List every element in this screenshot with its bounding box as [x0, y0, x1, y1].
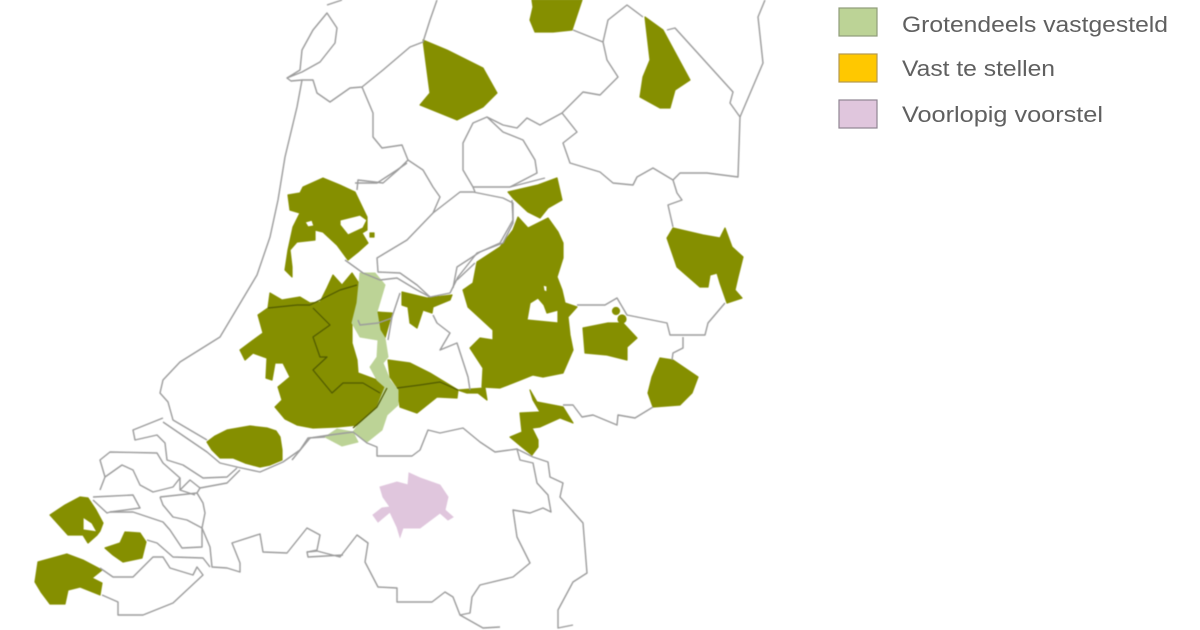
area: Gelderse Poort [510, 390, 573, 455]
area: river strip [458, 388, 487, 400]
legend item: vast te stellen [839, 54, 1055, 82]
area: Utrecht centre [402, 292, 452, 328]
area: Flevo corner [508, 178, 562, 218]
area: Noord-Holland [285, 178, 368, 277]
legend item: voorlopig voorstel [839, 100, 1103, 128]
area: Waterlinie south [325, 429, 358, 446]
province borders [93, 0, 765, 628]
light green areas: grotendeels vastgesteld [325, 273, 398, 446]
area: Groningen top [530, 0, 582, 32]
area: Twente [667, 228, 743, 303]
area: Achterhoek [583, 323, 637, 360]
area: Waterlinie [352, 273, 398, 442]
area: Hoeksche Waard [207, 426, 282, 467]
legend [839, 8, 1168, 128]
green areas: vastgesteld [35, 0, 743, 604]
legend item: grotendeels vastgesteld [839, 8, 1168, 37]
area: Friesland [420, 40, 497, 120]
area: small patch [370, 233, 374, 237]
area: Drenthe [640, 17, 690, 108]
area: Utrecht west [377, 312, 392, 338]
area: Zeeuws-Vlaanderen [35, 554, 102, 604]
area: Groene Hart [240, 273, 385, 428]
map of the Netherlands [35, 0, 765, 628]
area: Veluwe [463, 217, 577, 388]
legend item: grotendeels vastgesteld: Grotendeels vastgesteld [902, 12, 1168, 37]
purple area: voorlopig voorstel [373, 473, 453, 537]
area: Walcheren [50, 497, 103, 543]
legend item: vast te stellen: Vast te stellen [902, 56, 1055, 81]
area: Achterhoek dots [612, 308, 626, 323]
legend item: voorlopig voorstel: Voorlopig voorstel [902, 102, 1103, 127]
area: Winterswijk [648, 358, 698, 407]
area: Zuid-Beveland [105, 532, 146, 562]
area: rivers [388, 360, 458, 413]
dark border lines over green [268, 285, 458, 428]
